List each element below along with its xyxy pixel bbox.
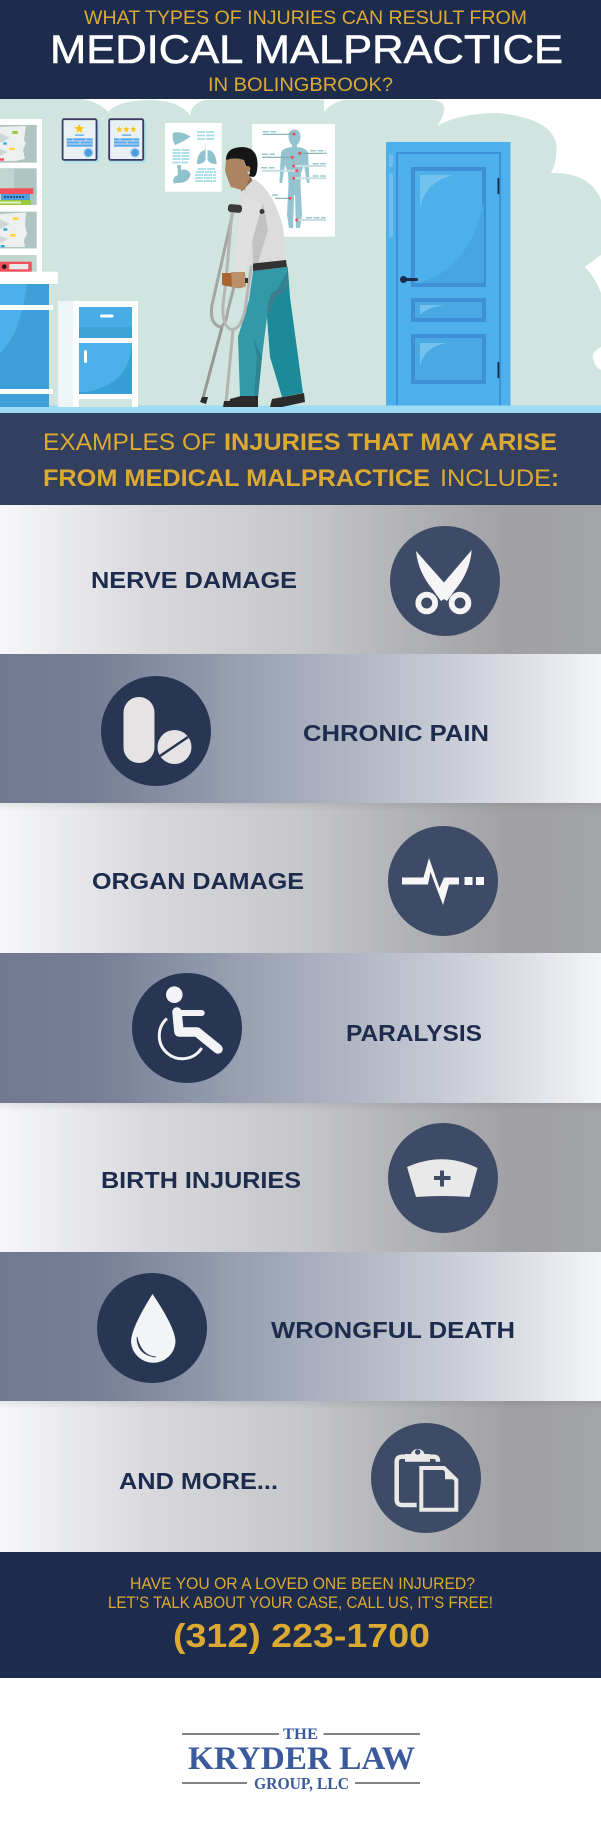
header line: what types of injuries: WHAT TYPES OF INJURIES CAN RESULT FROM: [84, 7, 527, 29]
neck: [238, 176, 254, 194]
door: [386, 142, 510, 406]
row: organ damage: [0, 803, 601, 953]
icon: clipboard: [371, 1423, 481, 1533]
poster: organs: [165, 123, 222, 192]
label: AND MORE...: [119, 1468, 278, 1494]
cta question: HAVE YOU OR A LOVED ONE BEEN INJURED?: [130, 1575, 475, 1593]
door panel: upper: [413, 169, 484, 285]
body silhouette: [280, 130, 310, 228]
heading text: line one: EXAMPLES OF: [43, 429, 216, 456]
lungs: [197, 142, 217, 164]
section heading band: [0, 413, 601, 505]
row: nerve damage: [0, 505, 601, 654]
arm shade: [252, 203, 268, 263]
call to action panel: [0, 1552, 601, 1678]
certificate: three stars: [109, 119, 146, 162]
label: NERVE DAMAGE: [91, 567, 297, 593]
face: [225, 158, 250, 190]
icon: droplet: [97, 1273, 207, 1383]
small white cabinet: [58, 301, 138, 407]
heading text: line two: INCLUDE: [440, 465, 551, 492]
hip shade: [267, 268, 288, 317]
back leg shade: [253, 337, 262, 397]
cta invitation: LET’S TALK ABOUT YOUR CASE, CALL US, IT’S FREE!: [108, 1594, 493, 1612]
poster: body diagram: [252, 124, 335, 237]
label: PARALYSIS: [346, 1020, 482, 1046]
stomach: [173, 165, 191, 184]
liver: [173, 132, 191, 145]
blue counter cabinet: [0, 272, 58, 407]
row: chronic pain: [0, 654, 601, 803]
row: wrongful death: [0, 1252, 601, 1401]
icon: nurse cap: [388, 1123, 498, 1233]
row: paralysis: [0, 953, 601, 1103]
label: ORGAN DAMAGE: [92, 868, 304, 894]
heading text: line two: :: [551, 465, 559, 492]
logo: The Kryder Law Group: THE: [283, 1726, 318, 1743]
title: medical malpractice: MEDICAL MALPRACTICE: [50, 28, 563, 72]
heading text: line one: INJURIES THAT MAY ARISE: [224, 429, 557, 456]
label: WRONGFUL DEATH: [271, 1317, 515, 1343]
floor: [0, 406, 601, 413]
label: BIRTH INJURIES: [101, 1167, 301, 1193]
front leg: [267, 270, 303, 397]
crutch top: [228, 204, 242, 213]
left shelves: [0, 119, 42, 272]
arm: [233, 195, 262, 272]
label: CHRONIC PAIN: [303, 720, 489, 746]
row: and more: [0, 1401, 601, 1552]
shoes: [229, 393, 305, 407]
hair: [226, 147, 258, 177]
logo: The Kryder Law Group: KRYDER LAW: [188, 1741, 415, 1777]
logo: The Kryder Law Group: GROUP, LLC: [254, 1774, 349, 1793]
light pants: [238, 267, 288, 397]
ear: [244, 166, 250, 172]
icon: wheelchair: [132, 973, 242, 1083]
heading text: line one: [43, 429, 557, 456]
header panel: [0, 0, 601, 99]
door panel: lower: [413, 336, 484, 382]
certificate: one star: [63, 119, 99, 162]
man on crutches: [200, 147, 305, 407]
belt: [253, 260, 287, 271]
heading text: line two: FROM MEDICAL MALPRACTICE: [43, 465, 430, 492]
mint wall cloud: [0, 99, 601, 413]
crutch grip: [222, 273, 232, 287]
icon: scissors: [390, 526, 500, 636]
shirt: [236, 179, 286, 268]
row: birth injuries: [0, 1103, 601, 1252]
door handle: [400, 276, 418, 283]
illustration: clinic room: [0, 99, 601, 413]
icon: heartbeat: [388, 826, 498, 936]
crutches: [200, 212, 262, 407]
logo: The Kryder Law Group: [182, 1726, 420, 1793]
hand: [231, 272, 246, 288]
icon: pills: [101, 676, 211, 786]
door panel: middle: [413, 300, 484, 320]
phone number: (312) 223-1700: [173, 1617, 430, 1654]
header line: in Bolingbrook: IN BOLINGBROOK?: [208, 74, 393, 96]
